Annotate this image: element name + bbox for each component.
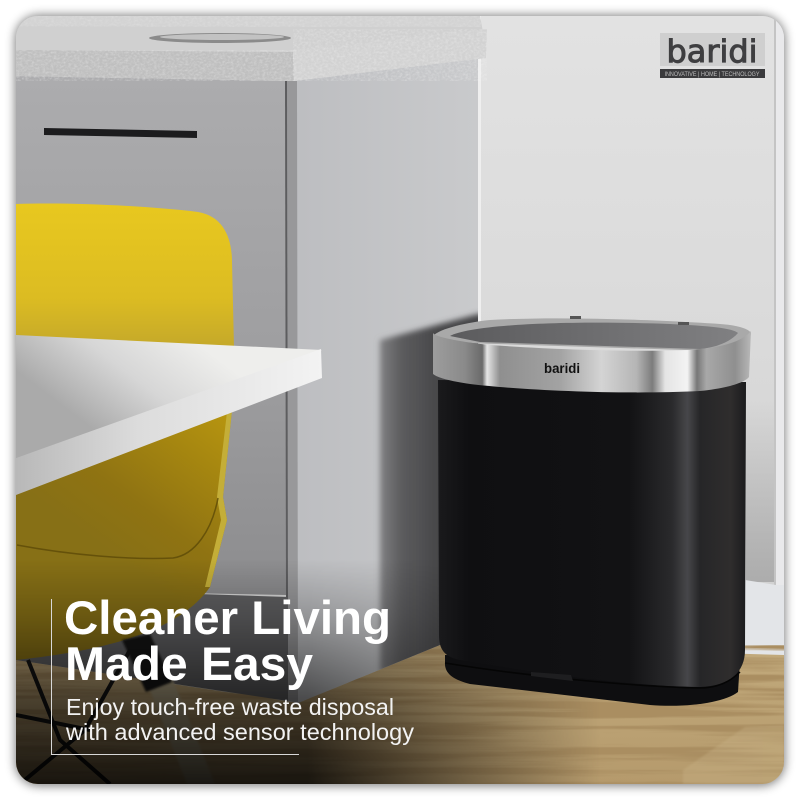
- trash bin: [433, 316, 751, 706]
- bottom gradient overlay: [16, 560, 600, 790]
- countertop steel ring: [149, 33, 291, 43]
- foot pedal: [531, 672, 573, 681]
- countertop: [16, 16, 487, 81]
- bin base: [445, 655, 740, 706]
- brand logo: baridi: [666, 34, 758, 70]
- brand logo: [660, 33, 765, 78]
- bin logo: baridi: [544, 360, 580, 376]
- heading: [64, 591, 391, 690]
- cabinet front: [16, 76, 298, 703]
- baseboard: [745, 580, 776, 655]
- cabinet side: [286, 58, 478, 703]
- floor: [16, 645, 784, 784]
- white table: [16, 335, 322, 495]
- subheading: [65, 694, 415, 745]
- heading: Made Easy: [65, 637, 313, 690]
- chair legs: [16, 634, 215, 784]
- wall: [478, 16, 784, 585]
- brand logo: INNOVATIVE | HOME | TECHNOLOGY: [664, 72, 760, 78]
- bin lid: [433, 316, 751, 352]
- drawer handle: [44, 128, 197, 138]
- yellow chair: [16, 203, 234, 660]
- shadow cast by bin on cabinet: [376, 310, 478, 670]
- subheading: with advanced sensor technology: [65, 719, 415, 745]
- bin base seam: [445, 663, 740, 688]
- text frame lines: [52, 599, 299, 754]
- heading: Cleaner Living: [64, 591, 391, 644]
- steel band: [433, 331, 751, 392]
- subheading: Enjoy touch-free waste disposal: [66, 694, 394, 720]
- bin body: [438, 380, 746, 687]
